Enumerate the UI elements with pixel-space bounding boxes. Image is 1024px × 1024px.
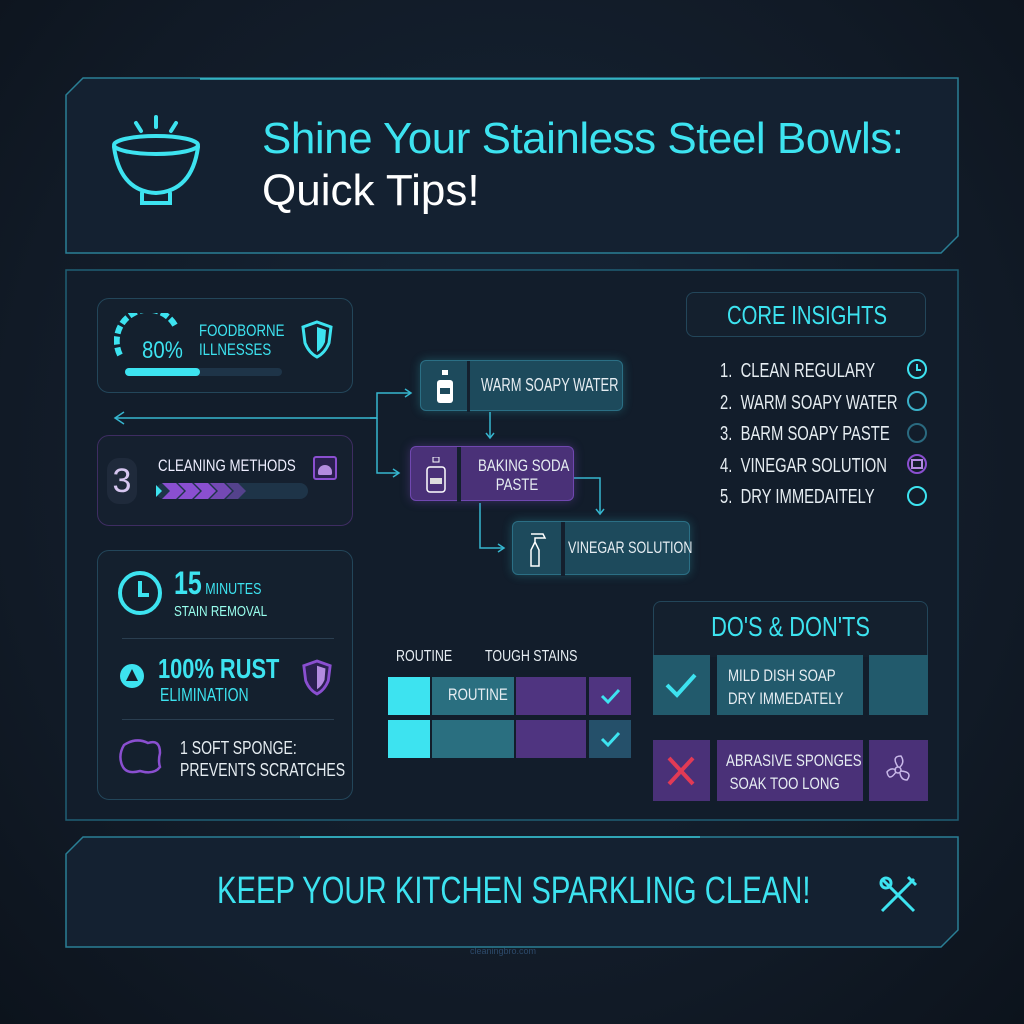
- do's and don'ts panel: DRY IMMEDATELY: [728, 689, 843, 708]
- stat card: metrics: [97, 550, 353, 800]
- stat card: metrics: PREVENTS SCRATCHES: [180, 760, 345, 780]
- core insights heading: [686, 292, 926, 337]
- stat card: cleaning methods: 3: [113, 462, 131, 500]
- table: routine vs tough stains: [388, 648, 631, 758]
- core insights list: 3. BARM SOAPY PASTE: [720, 423, 890, 445]
- stat card: metrics: 100% RUST: [158, 653, 279, 684]
- header panel: Quick Tips!: [262, 166, 480, 215]
- core insights list: [720, 359, 927, 508]
- header panel: [112, 114, 903, 215]
- stat card: foodborne: ILLNESSES: [199, 340, 271, 359]
- stat card: cleaning methods: CLEANING METHODS: [158, 456, 296, 475]
- flow: warm soapy water: [420, 360, 623, 411]
- flow: baking soda paste: [410, 446, 574, 501]
- icon: clock: [118, 571, 162, 615]
- table: routine vs tough stains: ROUTINE: [448, 685, 508, 704]
- table: routine vs tough stains: TOUGH STAINS: [485, 648, 577, 665]
- icon: utensils: [880, 876, 917, 912]
- core insights list: 4. VINEGAR SOLUTION: [720, 455, 887, 477]
- flow: warm soapy water: WARM SOAPY WATER: [481, 375, 619, 395]
- flow: baking soda paste: BAKING SODA: [478, 456, 569, 475]
- core insights list: 5. DRY IMMEDAITELY: [720, 486, 875, 508]
- do's and don'ts panel: DO'S & DON'TS: [711, 611, 870, 642]
- icon: bowl: [112, 115, 200, 205]
- title: Shine Your Stainless Steel Bowls:: [262, 114, 903, 163]
- do's and don'ts panel: [653, 601, 928, 801]
- do's and don'ts panel: MILD DISH SOAP: [728, 666, 836, 685]
- core insights list: 2. WARM SOAPY WATER: [720, 392, 898, 414]
- stat card: metrics: STAIN REMOVAL: [174, 603, 267, 620]
- flow: vinegar solution: VINEGAR SOLUTION: [568, 538, 692, 557]
- do's and don'ts panel: SOAK TOO LONG: [730, 774, 840, 793]
- stat card: foodborne: [97, 298, 353, 393]
- watermark: cleaningbro.com: [470, 946, 536, 956]
- stat card: cleaning methods: [97, 435, 353, 526]
- stat card: metrics: 1 SOFT SPONGE:: [180, 738, 297, 758]
- stat card: foodborne: 80%: [142, 337, 183, 364]
- flow: baking soda paste: PASTE: [496, 475, 538, 494]
- stat card: metrics: 15 MINUTES: [174, 565, 261, 601]
- do's and don'ts panel: ABRASIVE SPONGES: [726, 751, 862, 770]
- core insights list: 1. CLEAN REGULARY: [720, 360, 875, 382]
- stat card: foodborne: FOODBORNE: [199, 321, 284, 340]
- stat card: metrics: ELIMINATION: [160, 685, 249, 705]
- table: routine vs tough stains: ROUTINE: [396, 648, 452, 665]
- core insights heading: CORE INSIGHTS: [727, 300, 887, 330]
- footer banner: KEEP YOUR KITCHEN SPARKLING CLEAN!: [217, 870, 811, 912]
- flow: vinegar solution: [512, 521, 690, 575]
